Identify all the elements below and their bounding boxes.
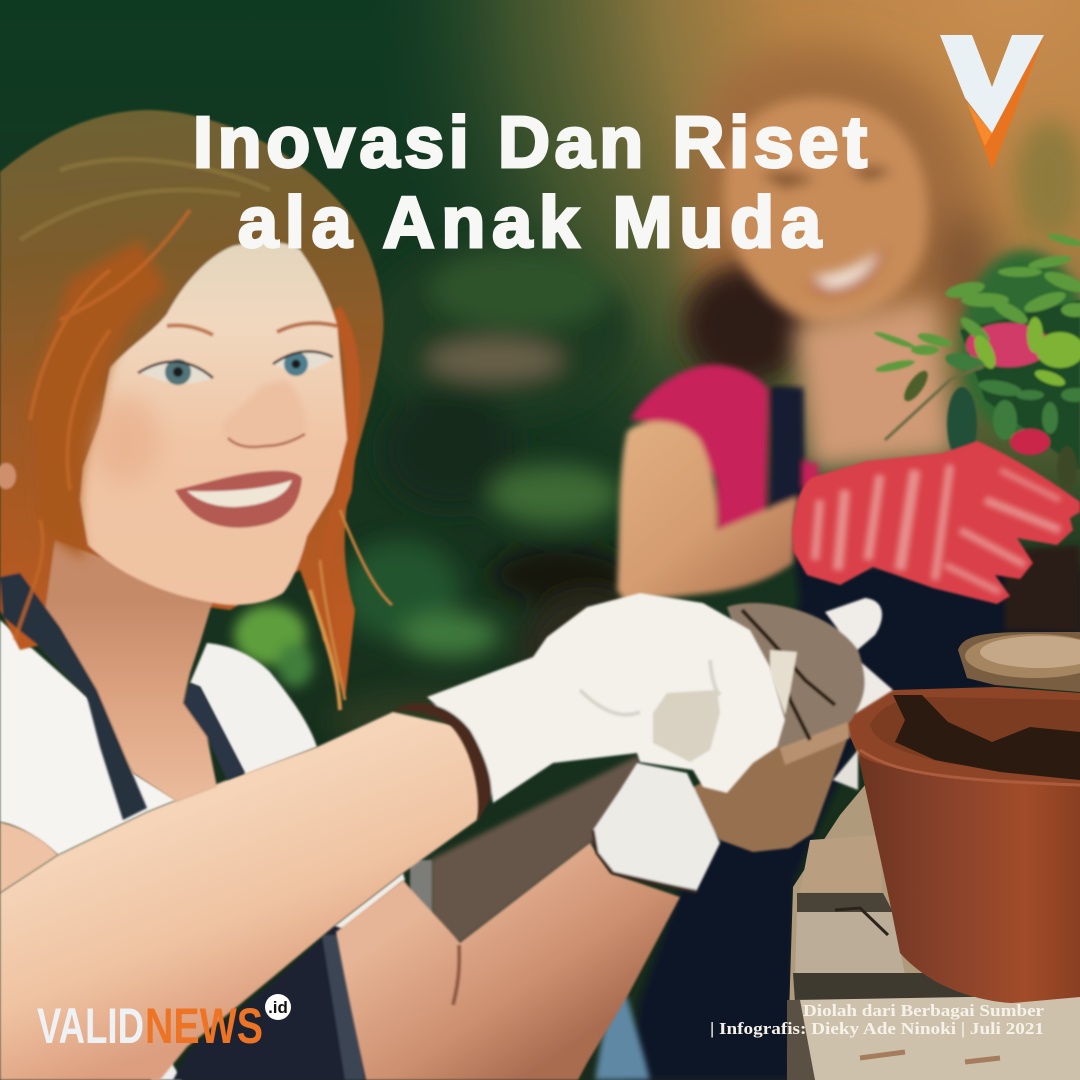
big terracotta pot with soil: [843, 687, 1080, 1003]
brand logo: VALIDNEWS.id: VALID: [37, 998, 144, 1054]
white shirt front woman: [0, 620, 405, 1080]
apron strap: [770, 388, 803, 508]
hair mass: [0, 110, 383, 700]
dark apron front: [173, 925, 368, 1080]
face: [80, 242, 347, 605]
cheek: [91, 396, 159, 484]
source credit: [710, 1001, 1044, 1038]
brick floor: [430, 755, 640, 945]
back arm: [617, 421, 797, 602]
ear: [0, 463, 16, 489]
source credit: | Infografis: Dieky Ade Ninoki | Juli 2021: [710, 1019, 1044, 1038]
front woman head: [0, 110, 392, 820]
brand logo: VALIDNEWS.id: [37, 994, 291, 1054]
apron strap right: [183, 683, 245, 780]
eyes: [140, 363, 213, 384]
lower arm: [336, 843, 680, 1080]
lips: [175, 471, 302, 528]
stone table: [787, 785, 1080, 1080]
teeth: [187, 480, 292, 507]
nose: [222, 380, 307, 448]
shoulder: [0, 822, 58, 893]
soil in back hand: [1005, 545, 1080, 632]
cuff: [393, 703, 491, 822]
lower glove: [593, 763, 720, 890]
neck: [40, 540, 217, 802]
trowel handle: [653, 690, 720, 762]
dark apron torso: [628, 388, 1080, 1080]
pink shirt: [630, 365, 768, 532]
title: ala Anak Muda: [238, 183, 822, 263]
source credit: Diolah dari Berbagai Sumber: [803, 1001, 1044, 1020]
trowel blade: [770, 650, 797, 715]
upper glove and cuff: [393, 593, 785, 822]
title: Inovasi Dan Riset: [193, 103, 867, 183]
hair fringe over the temple: [30, 240, 167, 560]
plant: [873, 231, 1080, 490]
orange side strands: [325, 310, 353, 640]
icon: V logo top right: [940, 35, 1044, 170]
left forearm: [0, 712, 490, 1080]
title: [193, 103, 867, 263]
brand logo: VALIDNEWS.id: .id: [268, 998, 288, 1017]
back woman: [595, 46, 1080, 1080]
back clay pot: [958, 632, 1080, 692]
apron strap left: [0, 573, 147, 820]
brand logo: VALIDNEWS.id: NEWS: [145, 998, 263, 1054]
small pot and gloves: [593, 598, 893, 892]
jeans: [595, 990, 650, 1080]
red glove: [792, 441, 1080, 604]
